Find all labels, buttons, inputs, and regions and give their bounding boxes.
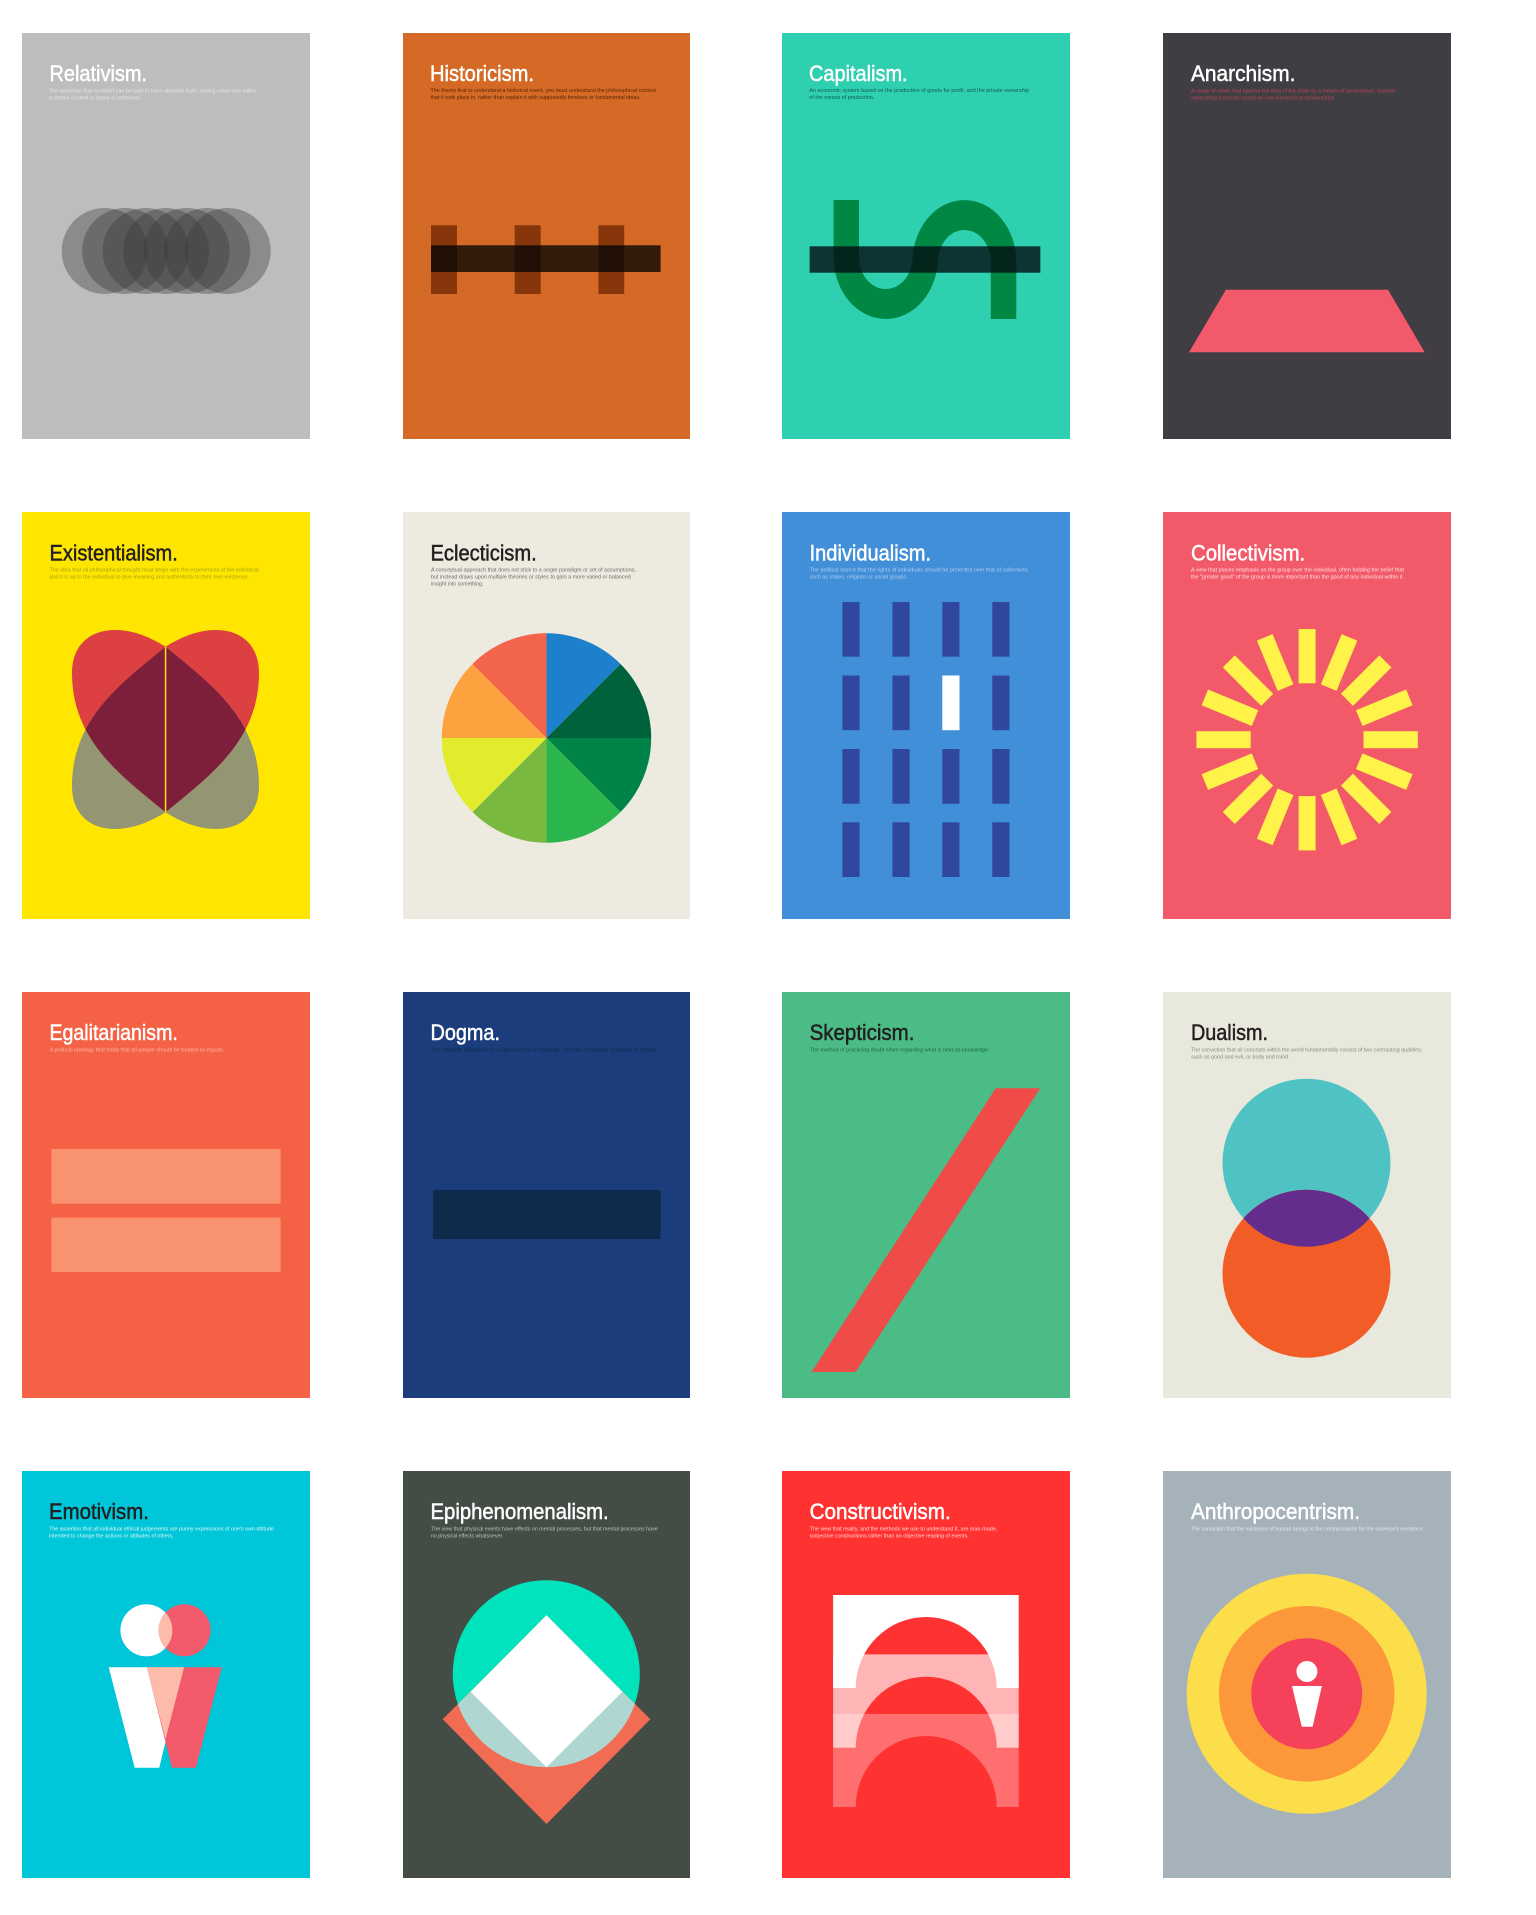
description: Epiphenomenalism: no physical effects whatsoever. xyxy=(431,1534,504,1540)
description: Anarchism: A range of views that oppose the idea of the state as a means of governance, instead xyxy=(1191,88,1395,94)
description: Eclecticism xyxy=(431,568,636,588)
panel: Emotivism xyxy=(22,1471,310,1878)
description: Anthropocentrism: The conviction that the existence of human beings is the central reason for the universe's existence. xyxy=(1191,1527,1425,1533)
title: Collectivism: Collectivism. xyxy=(1191,540,1305,565)
artwork: circle and diamond xyxy=(443,1580,650,1824)
description: Collectivism xyxy=(1191,568,1404,580)
artwork: concentric circles with figure xyxy=(1187,1574,1427,1814)
description: Individualism xyxy=(810,568,1029,580)
description: Collectivism: A view that places emphasis on the group over the individual, often holding the belief that xyxy=(1191,568,1404,574)
description: Egalitarianism: A political ideology that holds that all people should be treated as equals. xyxy=(50,1047,225,1053)
title: Existentialism: Existentialism. xyxy=(50,540,178,565)
description: Historicism: that it took place in, rather than explain it with supposedly timeless or fundamental ideas. xyxy=(430,95,641,101)
description: Historicism: The theory that to understand a historical event, you must understand the philosophical context xyxy=(430,88,656,94)
description: Emotivism: intended to change the actions or attitudes of others. xyxy=(49,1534,174,1540)
artwork: dollar sign xyxy=(810,200,1040,319)
panel: Relativism xyxy=(22,33,310,439)
artwork: slash xyxy=(812,1088,1040,1372)
description: Individualism: such as states, religions or social groups. xyxy=(810,574,908,580)
description: Existentialism: The idea that all philosophical thought must begin with the experiences of the individual, xyxy=(50,568,260,574)
panel: Anthropocentrism xyxy=(1163,1471,1451,1878)
title: Epiphenomenalism: Epiphenomenalism. xyxy=(430,1499,609,1524)
artwork: grid of bars with one white xyxy=(842,602,1010,877)
description: Eclecticism: but instead draws upon multiple theories or styles to gain a more varied or balanced xyxy=(431,574,631,580)
description: Dogma: The inflexible adherence to a rigid doctrine or ideology, not open to rational argument or debate. xyxy=(430,1047,658,1053)
panel: Existentialism xyxy=(22,512,310,919)
description: Constructivism: subjective constructions rather than an objective reading of events. xyxy=(810,1534,969,1540)
panel: Individualism xyxy=(782,512,1070,919)
description: Dualism xyxy=(1191,1047,1423,1060)
panel: Epiphenomenalism xyxy=(403,1471,690,1878)
description: Relativism xyxy=(49,88,256,102)
description: Capitalism: of the means of production. xyxy=(809,95,875,101)
description: Constructivism: The view that reality, and the methods we use to understand it, are man-made, xyxy=(810,1527,998,1533)
description: Dualism: such as good and evil, or body and mind. xyxy=(1191,1054,1290,1060)
artwork: ring of rays xyxy=(1196,629,1418,850)
title: Skepticism: Skepticism. xyxy=(810,1020,914,1045)
artwork: stacked arches xyxy=(833,1595,1019,1807)
description: Eclecticism: A conceptual approach that does not stick to a single paradigm or set of assumptions, xyxy=(431,568,636,574)
description: Capitalism: An economic system based on the production of goods for profit, and the private ownership xyxy=(809,88,1029,94)
title: Emotivism: Emotivism. xyxy=(49,1499,149,1524)
title: Historicism: Historicism. xyxy=(430,61,534,86)
description: Epiphenomenalism xyxy=(431,1527,658,1540)
artwork: two overlapping figures xyxy=(109,1604,222,1768)
panel: Historicism xyxy=(403,33,690,439)
description: Epiphenomenalism: The view that physical events have effects on mental processes, but that mental processes have xyxy=(431,1527,658,1533)
description: Existentialism: and it is up to the individual to give meaning and authenticity to their own existence. xyxy=(50,575,249,581)
title: Relativism: Relativism. xyxy=(50,61,147,86)
panel: Dualism xyxy=(1163,992,1451,1398)
description: Dualism: The conviction that all concepts within the world fundamentally consist of two contrasting qualities, xyxy=(1191,1047,1423,1053)
title: Anarchism: Anarchism. xyxy=(1191,61,1295,86)
panel: Anarchism xyxy=(1163,33,1451,439)
title: Dualism: Dualism. xyxy=(1191,1020,1268,1045)
description: Collectivism: the "greater good" of the group is more important than the good of any individual within it. xyxy=(1191,574,1404,580)
artwork: pie wheel xyxy=(442,633,651,843)
panel: Eclecticism xyxy=(403,512,690,919)
description: Capitalism xyxy=(809,88,1029,101)
panel: Constructivism xyxy=(782,1471,1070,1878)
title: Egalitarianism: Egalitarianism. xyxy=(50,1020,178,1045)
description: Relativism: The assertion that no belief can be said to have absolute truth, having value only within xyxy=(49,88,256,94)
description: Skepticism: The method of practicing doubt when regarding what is held as knowledge. xyxy=(810,1047,990,1053)
panel: Capitalism xyxy=(782,33,1070,439)
title: Eclecticism: Eclecticism. xyxy=(430,540,537,565)
description: Relativism: a certain context or frame of reference. xyxy=(49,96,142,102)
artwork: timeline bars xyxy=(431,225,661,294)
description: Constructivism xyxy=(810,1527,998,1540)
title: Dogma: Dogma. xyxy=(430,1020,500,1045)
panel: Skepticism xyxy=(782,992,1070,1398)
artwork: equals sign xyxy=(51,1149,281,1272)
panel: Dogma xyxy=(403,992,690,1398)
panel: Egalitarianism xyxy=(22,992,310,1398)
description: Historicism xyxy=(430,88,656,101)
description: Individualism: The political stance that the rights of individuals should be protected over that of collectives, xyxy=(810,568,1029,574)
description: Anarchism: advocating a society based on non-hierarchical relationships. xyxy=(1191,96,1336,102)
artwork: dark bar xyxy=(433,1190,661,1239)
title: Capitalism: Capitalism. xyxy=(809,61,908,86)
description: Emotivism xyxy=(49,1527,274,1540)
description: Existentialism xyxy=(50,568,260,581)
description: Emotivism: The assertion that all individual ethical judgements are purely expressions of one's own attitude xyxy=(49,1527,274,1533)
artwork: two overlapping circles xyxy=(1222,1079,1390,1358)
title: Individualism: Individualism. xyxy=(810,540,931,565)
title: Constructivism: Constructivism. xyxy=(810,1499,951,1524)
description: Anarchism xyxy=(1191,88,1395,102)
panel: Collectivism xyxy=(1163,512,1451,919)
artwork: overlapping circles xyxy=(62,208,271,294)
description: Eclecticism: insight into something. xyxy=(431,582,484,588)
artwork: trapezoid xyxy=(1189,290,1425,352)
title: Anthropocentrism: Anthropocentrism. xyxy=(1191,1499,1360,1524)
artwork: overlapping hearts xyxy=(72,630,259,829)
